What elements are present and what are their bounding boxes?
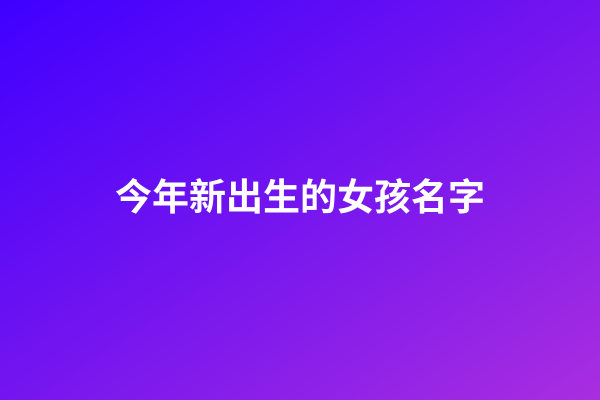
title: 今年新出生的女孩名字 bbox=[115, 177, 485, 218]
